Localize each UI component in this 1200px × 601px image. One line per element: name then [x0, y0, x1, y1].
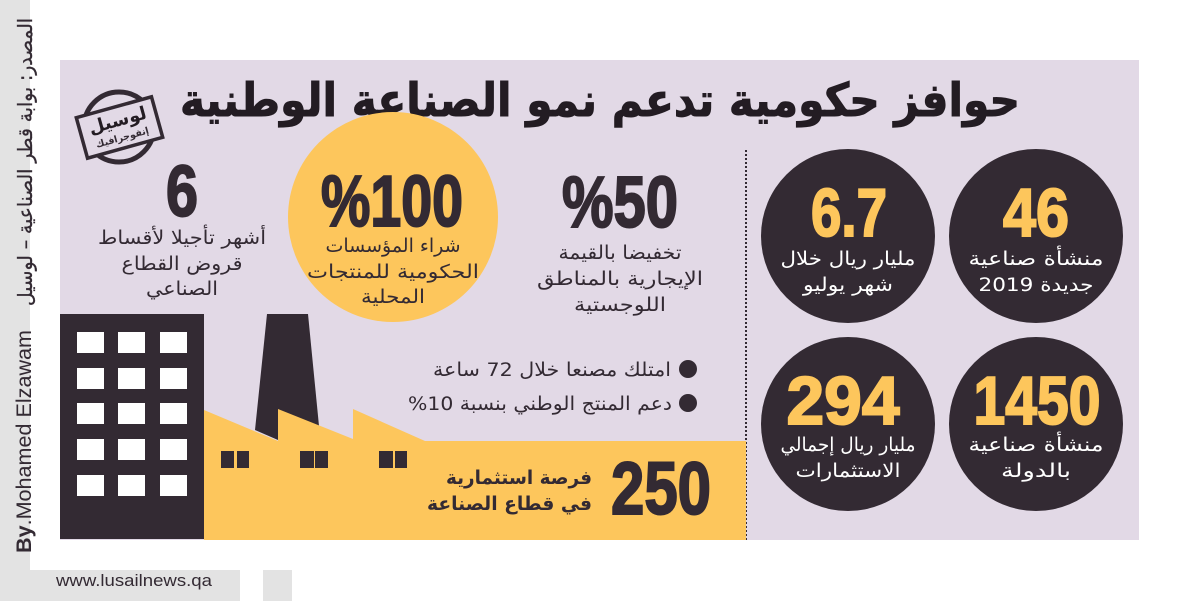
- stat: 50 percent: تخفيضا بالقيمة: [558, 242, 682, 264]
- stat: 6 months: قروض القطاع: [122, 253, 242, 275]
- title: حوافز حكومية تدعم نمو الصناعة الوطنية: [180, 73, 1020, 127]
- stat: 6 months: أشهر تأجيلا لأقساط: [98, 224, 266, 249]
- stat: 50 percent: [537, 163, 703, 316]
- bullet list: امتلك مصنعا خلال 72 ساعة: [433, 359, 671, 381]
- main panel: [60, 60, 1139, 540]
- stat circle: 1450: منشأة صناعية: [968, 431, 1104, 456]
- stat circle: 294: مليار ريال إجمالي: [780, 434, 916, 457]
- stat circle: 6.7: شهر يوليو: [802, 274, 893, 296]
- left source strip: [0, 0, 292, 601]
- stat circle: 1450: بالدولة: [1001, 460, 1071, 482]
- stat circle: 46: 46: [1003, 175, 1069, 251]
- stat: 250 opportunities: 250: [611, 447, 711, 530]
- logo stamp: إنفوجرافيك: [95, 126, 150, 151]
- stat circle: 46: منشأة صناعية: [968, 245, 1104, 270]
- bullet list: دعم المنتج الوطني بنسبة 10%: [408, 393, 672, 415]
- factory illustration: [204, 314, 746, 540]
- stat circle: 294: 294: [786, 363, 900, 439]
- stat circle: 46: [949, 149, 1123, 323]
- stat circle: 46: جديدة 2019: [978, 274, 1094, 296]
- stat circle: 1450: 1450: [974, 363, 1100, 439]
- stat circle: 6.7: مليار ريال خلال: [780, 248, 916, 270]
- stat: 6 months: 6: [166, 152, 198, 232]
- stat: 50 percent: الإيجارية بالمناطق: [537, 268, 703, 290]
- stat: 100 percent: شراء المؤسسات: [326, 235, 460, 257]
- stat circle: 1450: [949, 337, 1123, 511]
- stat circle: 294: الاستثمارات: [796, 460, 900, 482]
- website: www.lusailnews.qa: [55, 571, 213, 590]
- stat: 6 months: الصناعي: [146, 278, 218, 300]
- bullet list: [408, 359, 697, 415]
- stat circle: 6.7: [761, 149, 935, 323]
- logo stamp: [76, 92, 163, 162]
- stat circle: 6.7: 6.7: [811, 175, 887, 251]
- stat: 100 percent: %100: [321, 162, 463, 242]
- stat: 100 percent: [288, 112, 498, 322]
- designer credit: By.Mohamed Elzawam: [13, 330, 36, 553]
- source credit: المصدر: بوابة قطر الصناعية – لوسيل: [13, 18, 37, 306]
- stat circle: 294: [761, 337, 935, 511]
- stat: 50 percent: اللوجستية: [574, 294, 666, 316]
- stat: 6 months: [98, 152, 266, 300]
- building: [60, 314, 204, 539]
- stat: 50 percent: %50: [562, 163, 678, 243]
- logo stamp: لوسيل: [86, 103, 149, 139]
- dotted divider: [745, 150, 747, 540]
- stat: 250 opportunities: في قطاع الصناعة: [427, 493, 592, 515]
- stat: 100 percent: الحكومية للمنتجات: [307, 261, 479, 283]
- stat: 250 opportunities: [427, 447, 711, 530]
- stat: 100 percent: المحلية: [361, 286, 425, 308]
- stat: 250 opportunities: فرصة استثمارية: [446, 467, 592, 489]
